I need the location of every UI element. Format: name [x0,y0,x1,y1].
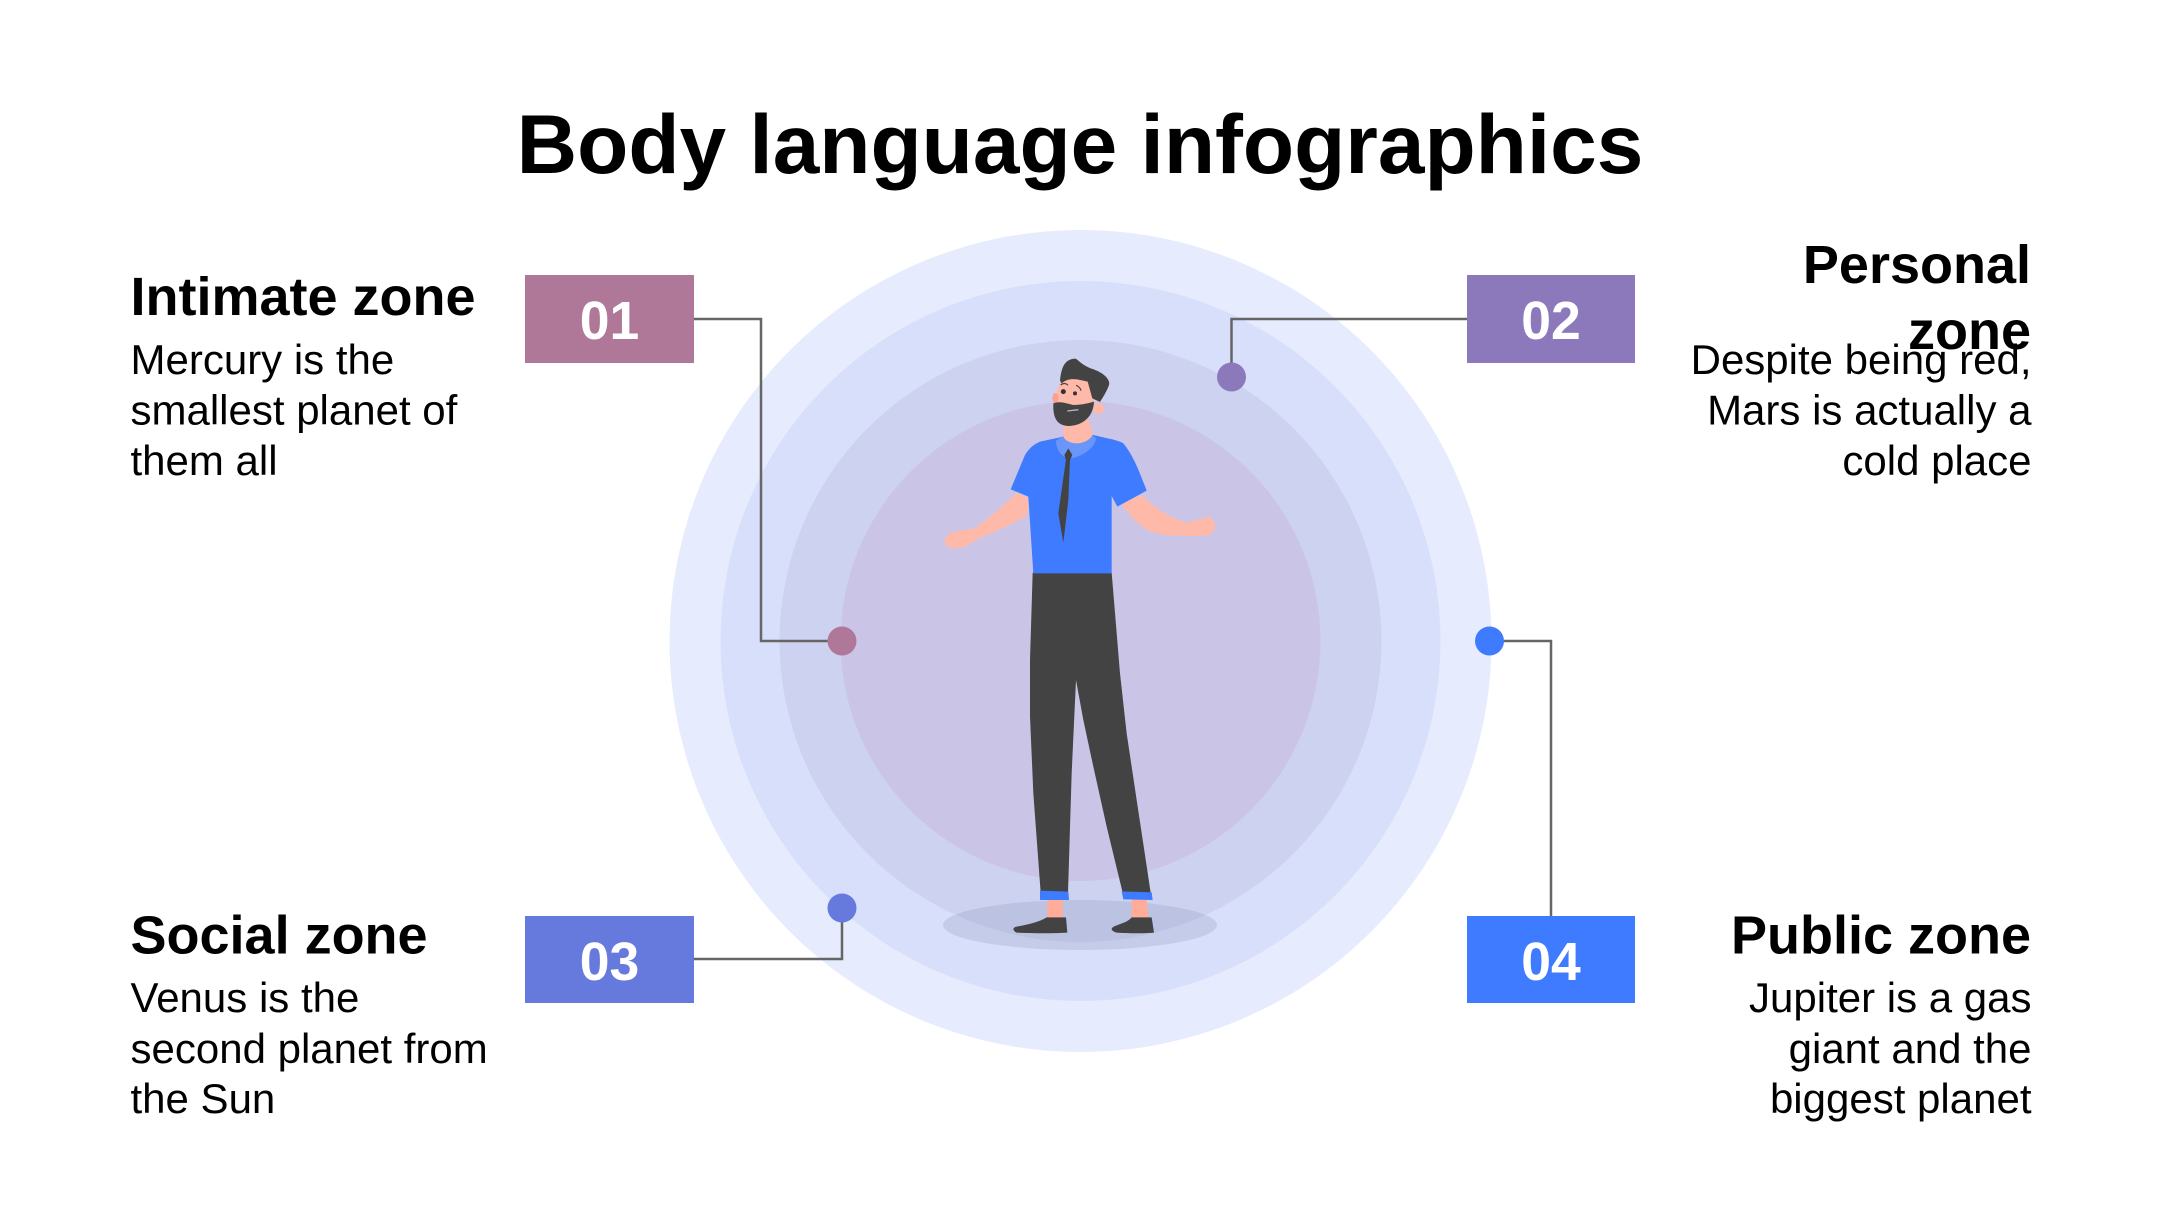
number box 01 [525,275,694,363]
torso and head [945,359,1215,573]
description: Despite being red, [1691,336,2032,383]
description [1749,974,2032,1122]
number box 04 [1467,916,1635,1003]
heading: Public zone [1731,906,2031,966]
heading: Social zone [130,906,428,966]
number box 02 [1467,275,1635,363]
illustration: standing man [943,359,1217,950]
heading: Intimate zone [130,267,476,327]
connector and dot 02 [1217,319,1467,392]
description: Mercury is the [130,336,394,383]
number box 01: 01 [580,292,639,351]
panel: personal zone [1217,235,2032,484]
concentric zone circles [670,230,1492,1052]
connector and dot 03 [694,894,856,959]
legs and shoes [1013,573,1154,933]
description: second planet from [130,1025,488,1072]
description [130,336,458,484]
description: biggest planet [1770,1075,2032,1122]
heading: Personal [1803,235,2031,295]
description: Venus is the [130,974,359,1021]
description [1691,336,2032,484]
connector and dot 01 [694,319,856,656]
connector and dot 04 [1475,626,1551,916]
title: Body language infographics [517,97,1643,191]
heading: zone [1908,301,2031,361]
description: cold place [1842,437,2032,484]
number box 03: 03 [580,933,639,992]
description: Mars is actually a [1707,386,2032,434]
description: Jupiter is a gas [1749,974,2032,1021]
number box 03 [525,916,694,1003]
heading [1803,235,2031,361]
ground shadow [943,900,1217,950]
description: them all [130,437,278,484]
description [130,974,488,1122]
number box 02: 02 [1521,292,1581,351]
description: giant and the [1789,1025,2032,1072]
description: smallest planet of [130,386,458,434]
panel: social zone [130,894,856,1122]
panel: intimate zone [130,267,856,656]
panel: public zone [1467,626,2032,1122]
description: the Sun [130,1075,275,1122]
number box 04: 04 [1521,933,1581,992]
